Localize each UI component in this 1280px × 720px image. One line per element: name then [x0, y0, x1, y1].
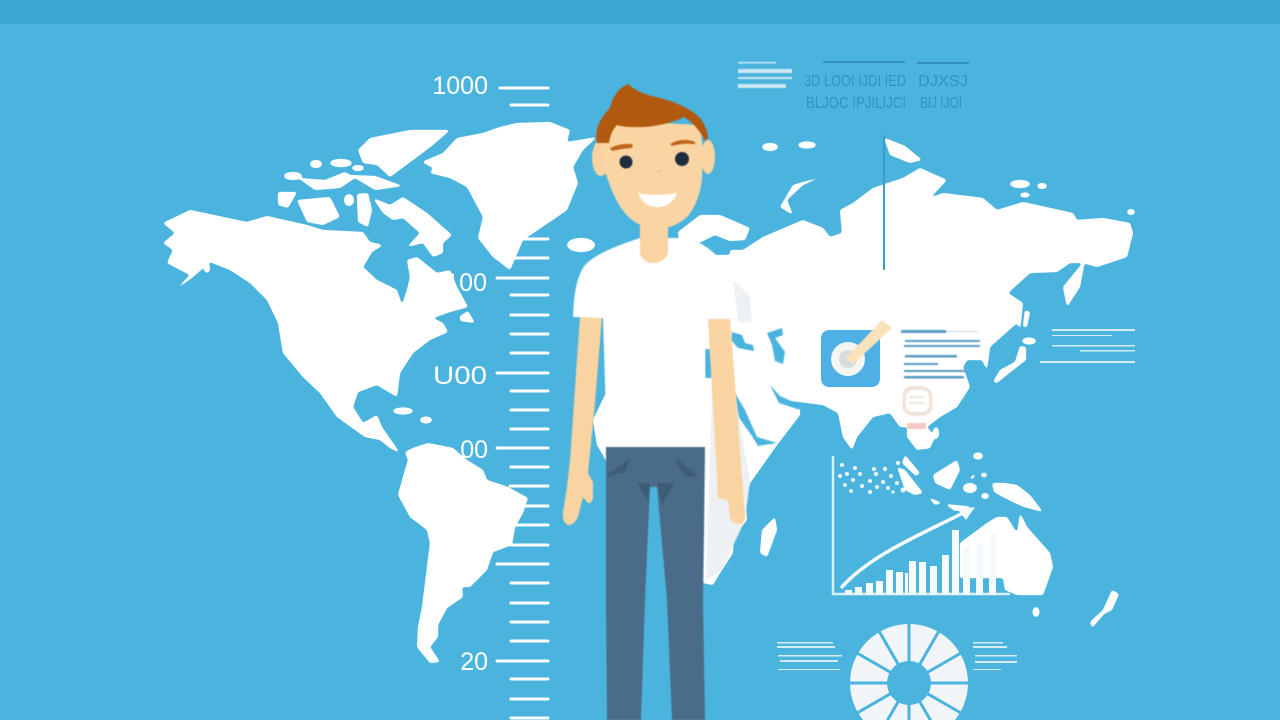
right side faint lines: [1040, 329, 1135, 363]
ruler labels: [432, 72, 488, 676]
person: neck: [640, 222, 668, 263]
person: ears: [592, 140, 715, 176]
person: nose: [658, 170, 660, 172]
ruler labels: 20: [460, 648, 488, 676]
map: Madagascar: [760, 517, 777, 557]
ruler labels: 100: [445, 269, 487, 297]
height ruler: [497, 88, 548, 718]
person: [563, 84, 745, 720]
map: Canadian Arctic islands: [278, 130, 452, 257]
chart: axes: [833, 456, 1010, 594]
wheel left caption lines: [777, 642, 842, 670]
ruler labels: 00: [460, 436, 488, 464]
chart: bars, trend and dots: [833, 456, 1010, 595]
chart: bars: [845, 530, 996, 595]
chart: trend arrow: [841, 507, 975, 588]
blue text rows: BLJOC IPJILIJCI: [806, 95, 906, 112]
person: eyebrows: [610, 140, 695, 151]
target icon: [821, 320, 892, 387]
wheel right caption lines: [973, 642, 1017, 670]
sea: inlet: [699, 242, 705, 248]
map: Scandinavia: [678, 215, 750, 250]
inland seas: [475, 215, 800, 446]
white heading lines: [738, 62, 792, 88]
person: eyes: [620, 152, 689, 168]
blue text rows: [804, 61, 969, 112]
map: Arctic Russia islands: [762, 138, 1135, 215]
map: New Zealand: [1090, 590, 1119, 628]
map: South America: [398, 443, 528, 663]
vertical line: [883, 135, 885, 270]
top band: [0, 0, 1280, 24]
map: Australia: [960, 513, 1053, 595]
person: smile: [638, 193, 677, 207]
map: Southeast Asia islands: [897, 427, 989, 511]
map: Sakhalin and Japan: [993, 310, 1036, 383]
sea: Caspian Sea: [767, 328, 785, 364]
figure shadow on map: [706, 280, 752, 580]
person: jeans pockets and folds: [607, 458, 698, 505]
sea: Persian Gulf: [770, 385, 800, 410]
ruler labels: 1000: [432, 72, 488, 100]
world map: [163, 122, 1135, 663]
map: west Africa beyond figure: [593, 380, 640, 470]
sea: Red Sea: [735, 393, 777, 446]
small badge icon: [904, 388, 931, 429]
map: Iceland: [567, 238, 595, 252]
blue text rows: DJXSJ: [918, 73, 968, 90]
donut wheel: [846, 620, 972, 720]
person: shirt: [573, 238, 737, 447]
map: Greenland: [422, 122, 597, 270]
sea: Baffin lake: [475, 215, 481, 221]
person: face: [602, 120, 703, 229]
sea: Mediterranean: [705, 349, 713, 378]
map: Kamchatka: [1063, 260, 1085, 307]
person: right arm: [708, 319, 745, 524]
person: left arm: [563, 316, 602, 525]
top right faint text block: [738, 61, 969, 112]
map: Caribbean islands: [204, 263, 475, 424]
map: Eurasia and Africa: [690, 168, 1133, 585]
chart: dots: [838, 461, 906, 494]
blue text rows: 3D LOOI IJDI IED: [804, 73, 906, 90]
person: hair: [596, 84, 708, 143]
blue text rows: BIJ IJOI: [920, 95, 962, 112]
map: New Guinea: [992, 483, 1043, 512]
map: North America: [163, 210, 468, 453]
map: Tasmania: [1032, 607, 1040, 617]
ruler labels: U00: [433, 362, 487, 390]
list text lines: [901, 330, 980, 378]
person: jeans: [606, 447, 705, 720]
sea: Black Sea: [731, 332, 754, 351]
